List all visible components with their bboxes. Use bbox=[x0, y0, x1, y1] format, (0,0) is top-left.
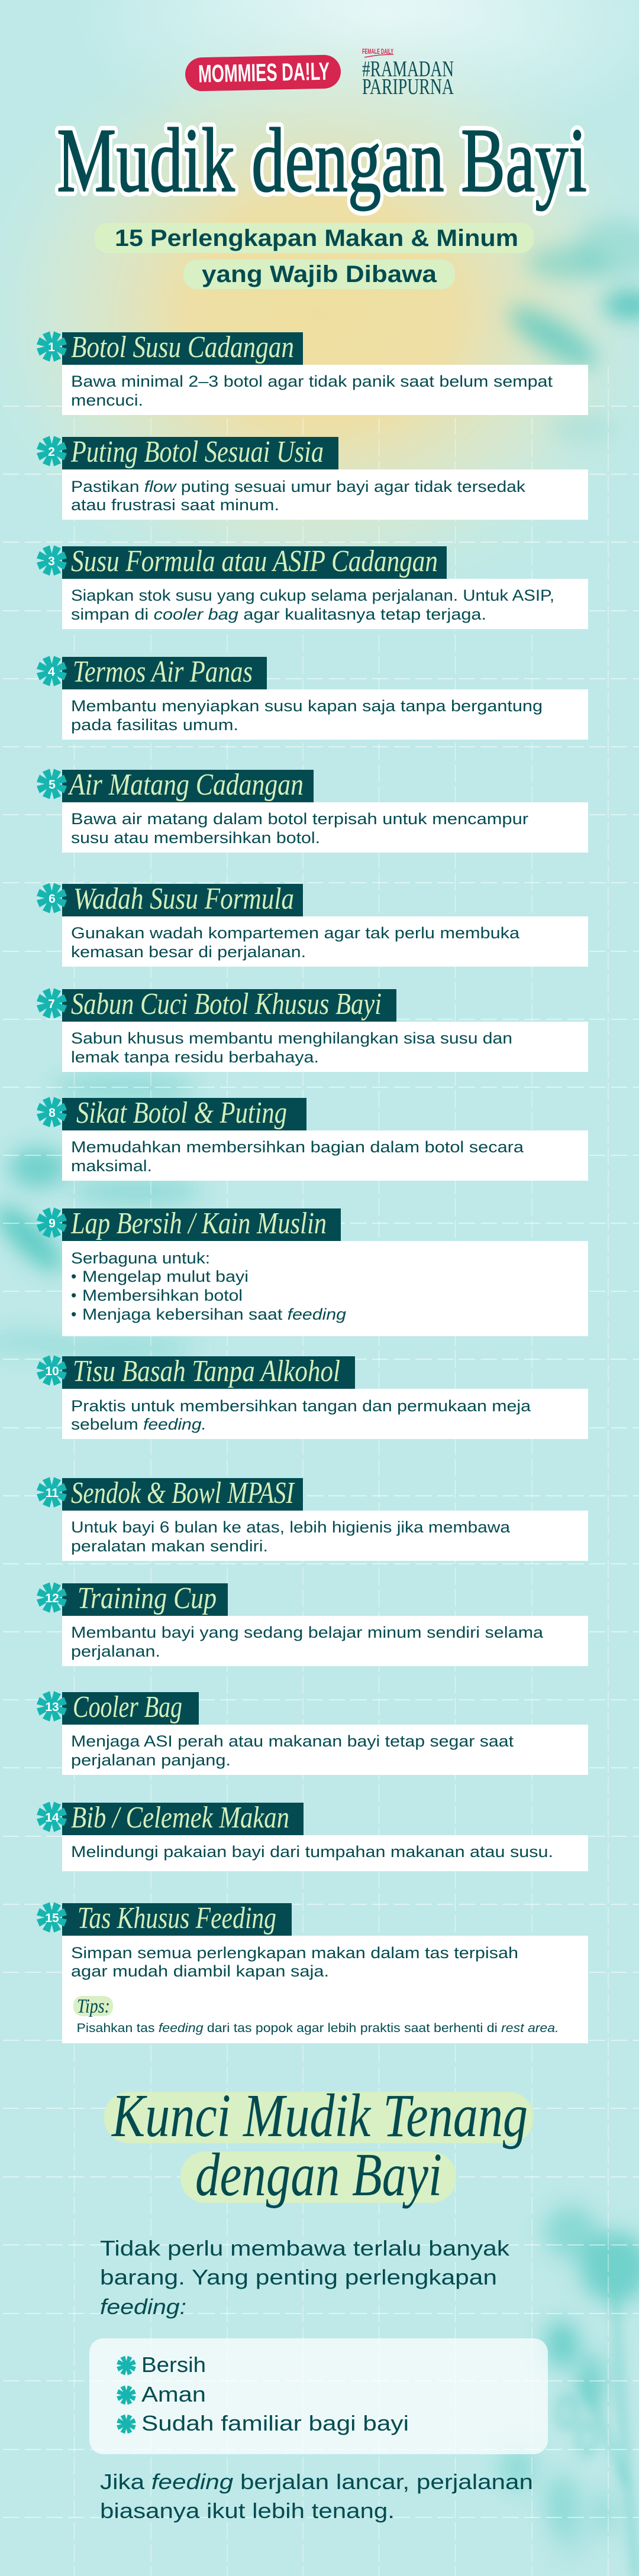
tips label: Tips: bbox=[77, 1995, 110, 2017]
badge 7: 7 bbox=[48, 997, 55, 1011]
badge 6 bbox=[37, 883, 67, 913]
text 1: mencuci. bbox=[71, 391, 143, 409]
badge 5 bbox=[37, 769, 67, 799]
closing note: biasanya ikut lebih tenang. bbox=[100, 2499, 395, 2523]
item: Aman bbox=[117, 2382, 206, 2406]
item: Bersih bbox=[117, 2353, 206, 2377]
subtitle bbox=[95, 223, 534, 289]
text 15 bbox=[62, 1936, 588, 2043]
badge 9 bbox=[37, 1207, 67, 1238]
heading 2: Puting Botol Sesuai Usia bbox=[70, 435, 324, 469]
logo: Female Daily Ramadan Paripurna: FEMALE DAILY bbox=[362, 47, 393, 56]
heading 15: Tas Khusus Feeding bbox=[78, 1901, 276, 1935]
closing paragraph bbox=[100, 2236, 510, 2319]
badge 11 bbox=[37, 1477, 67, 1508]
text 4 bbox=[62, 689, 588, 740]
badge 2 bbox=[37, 436, 67, 466]
closing heading: Kunci Mudik Tenang bbox=[111, 2082, 528, 2150]
text 15: Simpan semua perlengkapan makan dalam tas terpisah bbox=[71, 1944, 518, 1962]
item 3 bbox=[37, 545, 588, 629]
text 10: Praktis untuk membersihkan tangan dan permukaan meja bbox=[71, 1397, 531, 1415]
text 9: Membersihkan botol bbox=[82, 1287, 243, 1304]
text 5 bbox=[62, 802, 588, 853]
blurred flowers bottom right bbox=[500, 2205, 639, 2557]
text 15: agar mudah diambil kapan saja. bbox=[71, 1962, 329, 1980]
text 12 bbox=[62, 1616, 588, 1666]
item 12 bbox=[37, 1582, 588, 1666]
item 1 bbox=[37, 330, 588, 415]
heading 5: Air Matang Cadangan bbox=[67, 768, 304, 802]
badge 14: 14 bbox=[45, 1811, 59, 1825]
text 13: Menjaga ASI perah atau makanan bayi tetap segar saat bbox=[71, 1732, 514, 1750]
badge 13 bbox=[37, 1691, 67, 1722]
badge 7 bbox=[37, 988, 67, 1019]
text 2: atau frustrasi saat minum. bbox=[71, 496, 279, 514]
heading 4: Termos Air Panas bbox=[73, 655, 253, 689]
closing paragraph: feeding: bbox=[100, 2295, 186, 2319]
text 4: Membantu menyiapkan susu kapan saja tanpa bergantung bbox=[71, 697, 543, 715]
text 8: Memudahkan membersihkan bagian dalam botol secara bbox=[71, 1138, 524, 1156]
heading 6: Wadah Susu Formula bbox=[73, 882, 294, 916]
badge 8 bbox=[37, 1097, 67, 1127]
subtitle: yang Wajib Dibawa bbox=[202, 261, 437, 287]
text 1 bbox=[62, 365, 588, 415]
badge 6: 6 bbox=[49, 892, 56, 906]
closing heading bbox=[104, 2082, 534, 2209]
logo: Female Daily Ramadan Paripurna: PARIPURNA bbox=[362, 74, 454, 99]
text 9: Mengelap mulut bayi bbox=[82, 1268, 248, 1285]
badge 15: 15 bbox=[45, 1911, 59, 1925]
text 2 bbox=[62, 469, 588, 520]
text 13 bbox=[62, 1725, 588, 1775]
heading 11: Sendok & Bowl MPASI bbox=[71, 1476, 295, 1510]
text 14: Melindungi pakaian bayi dari tumpahan makanan atau susu. bbox=[71, 1843, 553, 1861]
item 9 bbox=[37, 1207, 588, 1336]
heading 10: Tisu Basah Tanpa Alkohol bbox=[73, 1355, 340, 1388]
badge 3 bbox=[37, 545, 67, 576]
badge 1: 1 bbox=[48, 341, 55, 354]
text 6 bbox=[62, 916, 588, 967]
text 11 bbox=[62, 1511, 588, 1561]
text 9: Menjaga kebersihan saat feeding bbox=[82, 1305, 346, 1323]
logo: Female Daily Ramadan Paripurna bbox=[362, 47, 454, 99]
closing paragraph: Tidak perlu membawa terlalu banyak bbox=[100, 2236, 510, 2260]
closing paragraph: barang. Yang penting perlengkapan bbox=[100, 2265, 497, 2289]
closing heading: dengan Bayi bbox=[195, 2141, 442, 2209]
heading 7: Sabun Cuci Botol Khusus Bayi bbox=[71, 987, 382, 1021]
badge 5: 5 bbox=[49, 778, 56, 792]
item 14 bbox=[37, 1801, 588, 1871]
heading 1: Botol Susu Cadangan bbox=[71, 330, 294, 364]
item 6 bbox=[37, 882, 588, 967]
text 8 bbox=[62, 1130, 588, 1181]
badge 10: 10 bbox=[45, 1365, 59, 1378]
blurred leaves top right bbox=[502, 219, 639, 443]
text 5: susu atau membersihkan botol. bbox=[71, 829, 320, 847]
text 9: Serbaguna untuk: bbox=[71, 1249, 210, 1267]
item 5 bbox=[37, 768, 588, 853]
item 10 bbox=[37, 1355, 588, 1439]
badge 2: 2 bbox=[48, 445, 55, 459]
text 12: perjalanan. bbox=[71, 1642, 160, 1660]
item 8 bbox=[37, 1096, 588, 1181]
badge 14 bbox=[37, 1801, 67, 1832]
heading 14: Bib / Celemek Makan bbox=[71, 1801, 289, 1835]
badge 4 bbox=[37, 656, 67, 686]
closing note: Jika feeding berjalan lancar, perjalanan bbox=[100, 2470, 533, 2494]
text 10: sebelum feeding. bbox=[71, 1415, 206, 1433]
text 9: • bbox=[71, 1305, 76, 1323]
text 2: Pastikan flow puting sesuai umur bayi agar tidak tersedak bbox=[71, 478, 526, 495]
badge 12: 12 bbox=[45, 1592, 59, 1605]
text 8: maksimal. bbox=[71, 1157, 152, 1175]
item: Aman: Aman bbox=[141, 2382, 206, 2406]
badge 10 bbox=[37, 1355, 67, 1386]
closing note bbox=[100, 2470, 533, 2523]
text 4: pada fasilitas umum. bbox=[71, 716, 238, 734]
heading 8: Sikat Botol & Puting bbox=[76, 1096, 287, 1130]
heading 12: Training Cup bbox=[78, 1582, 217, 1615]
badge 1 bbox=[37, 331, 67, 362]
text 10 bbox=[62, 1389, 588, 1439]
text 13: perjalanan panjang. bbox=[71, 1751, 231, 1769]
text 9: • bbox=[71, 1287, 76, 1304]
text 3: simpan di cooler bag agar kualitasnya tetap terjaga. bbox=[71, 605, 486, 623]
item 11 bbox=[37, 1476, 588, 1561]
text 7: lemak tanpa residu berbahaya. bbox=[71, 1048, 319, 1066]
logo: Mommies Daily: MOMMIES DA!LY bbox=[198, 57, 330, 88]
text 12: Membantu bayi yang sedang belajar minum sendiri selama bbox=[71, 1624, 543, 1641]
badge 15 bbox=[37, 1902, 67, 1933]
text 5: Bawa air matang dalam botol terpisah untuk mencampur bbox=[71, 810, 528, 828]
badge 11: 11 bbox=[46, 1486, 59, 1500]
text 11: Untuk bayi 6 bulan ke atas, lebih higienis jika membawa bbox=[71, 1518, 510, 1536]
badge 8: 8 bbox=[49, 1106, 56, 1120]
item: Sudah familiar bagi bayi: Sudah familiar bagi bayi bbox=[141, 2411, 409, 2435]
text 3 bbox=[62, 579, 588, 629]
text 3: Siapkan stok susu yang cukup selama perjalanan. Untuk ASIP, bbox=[71, 587, 554, 604]
heading 9: Lap Bersih / Kain Muslin bbox=[70, 1207, 327, 1240]
badge 9: 9 bbox=[49, 1217, 56, 1230]
text 9: • bbox=[71, 1268, 76, 1285]
text 14 bbox=[62, 1835, 588, 1871]
item 4 bbox=[37, 655, 588, 740]
text 7: Sabun khusus membantu menghilangkan sisa susu dan bbox=[71, 1029, 512, 1047]
text 6: Gunakan wadah kompartemen agar tak perlu membuka bbox=[71, 924, 519, 942]
text 6: kemasan besar di perjalanan. bbox=[71, 943, 306, 961]
badge 3: 3 bbox=[48, 555, 55, 568]
panel: checklist bbox=[89, 2338, 548, 2454]
heading 13: Cooler Bag bbox=[73, 1690, 182, 1724]
blurred leaves left bbox=[0, 1071, 201, 1359]
tips text: Pisahkan tas feeding dari tas popok agar lebih praktis saat berhenti di rest area. bbox=[77, 2021, 559, 2035]
subtitle: 15 Perlengkapan Makan & Minum bbox=[115, 225, 518, 251]
logo: Mommies Daily bbox=[185, 54, 341, 92]
badge 12 bbox=[37, 1582, 67, 1613]
item 7 bbox=[37, 987, 588, 1072]
item 13 bbox=[37, 1690, 588, 1775]
heading 3: Susu Formula atau ASIP Cadangan bbox=[71, 545, 438, 578]
item 2 bbox=[37, 435, 588, 520]
badge 13: 13 bbox=[45, 1700, 59, 1714]
badge 4: 4 bbox=[48, 665, 55, 679]
text 7 bbox=[62, 1022, 588, 1072]
text 11: peralatan makan sendiri. bbox=[71, 1537, 268, 1555]
text 1: Bawa minimal 2–3 botol agar tidak panik saat belum sempat bbox=[71, 372, 553, 390]
logo: Female Daily Ramadan Paripurna: #RAMADAN bbox=[362, 57, 454, 82]
item: Bersih: Bersih bbox=[141, 2353, 206, 2377]
item 15 bbox=[37, 1901, 588, 2043]
text 9 bbox=[62, 1241, 588, 1336]
